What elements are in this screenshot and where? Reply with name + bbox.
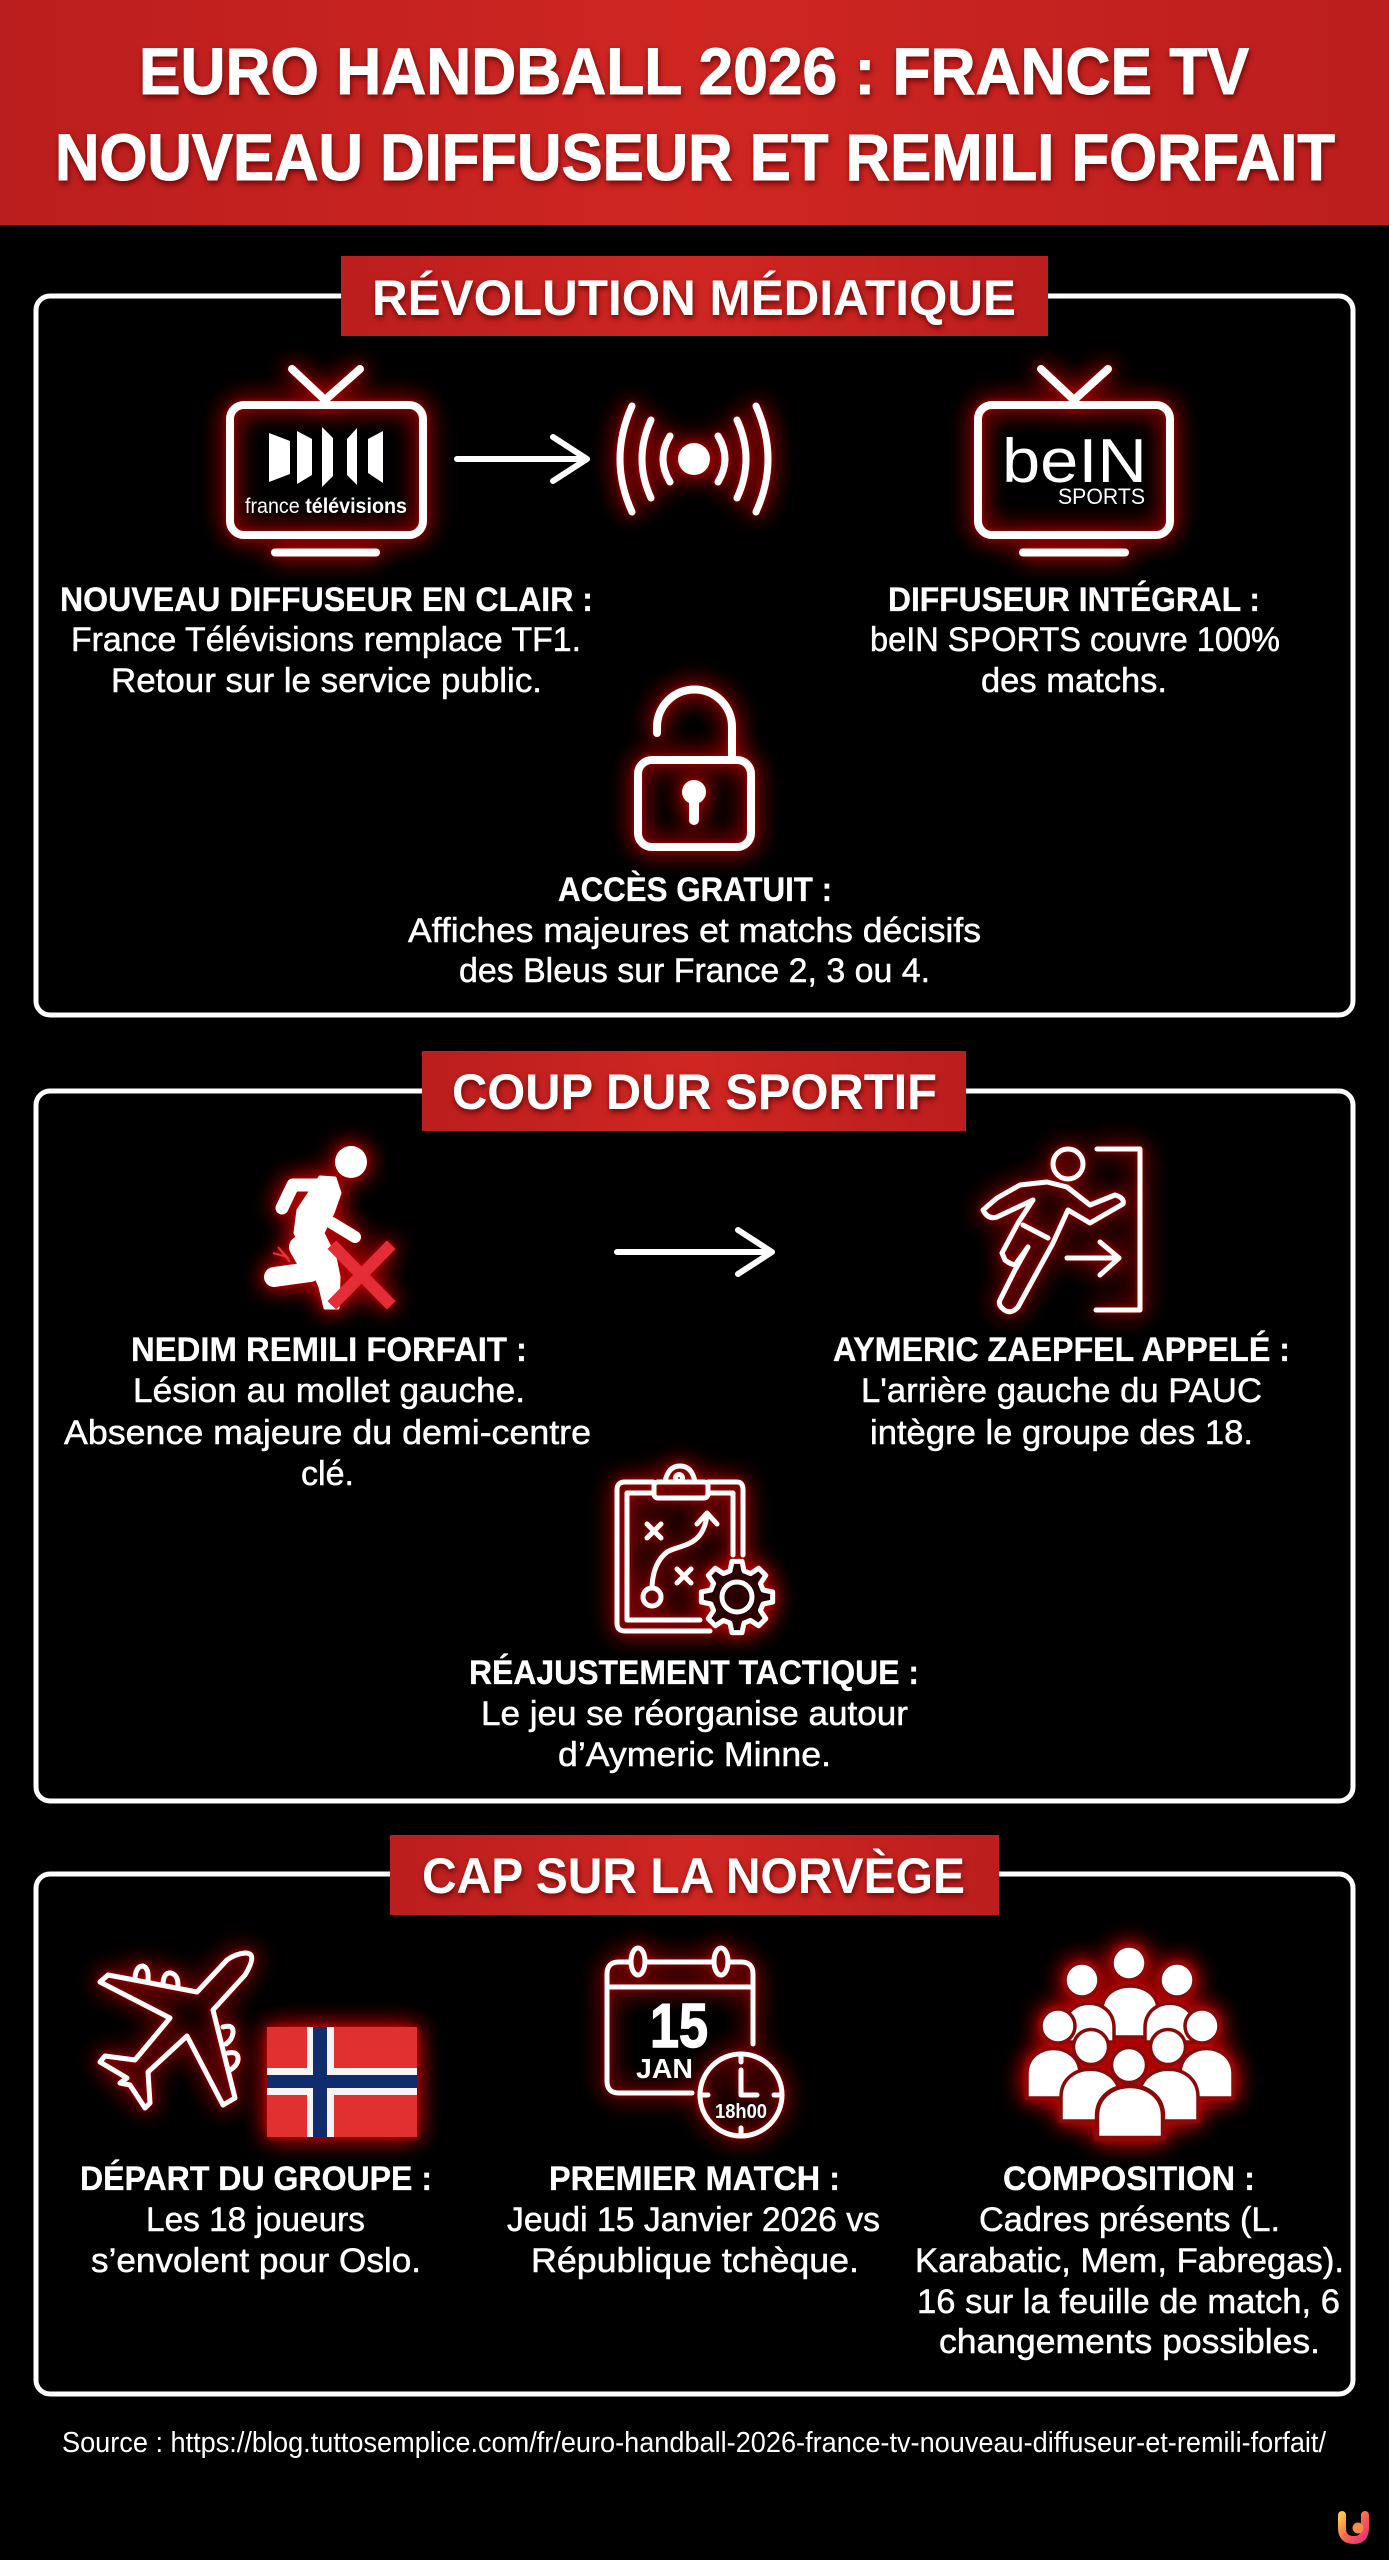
section heading: cap sur la norvège: CAP SUR LA NORVÈGE xyxy=(422,1848,965,1904)
text: composition: 16 sur la feuille de match, 6 xyxy=(917,2283,1340,2321)
icon: Norway flag xyxy=(267,2027,417,2137)
text: nedim remili forfait: NEDIM REMILI FORFAIT : xyxy=(131,1331,527,1369)
text: départ du groupe: DÉPART DU GROUPE : xyxy=(80,2160,432,2198)
text: nouveau diffuseur en clair: France Télévisions remplace TF1. xyxy=(71,621,581,659)
text: accès gratuit: des Bleus sur France 2, 3 ou 4. xyxy=(459,952,930,990)
icon: injured player xyxy=(273,1146,387,1308)
text: nedim remili forfait: Absence majeure du demi-centre xyxy=(64,1414,591,1452)
text: composition: COMPOSITION : xyxy=(1003,2160,1255,2198)
icon: TV beIN Sports: beIN xyxy=(1002,427,1147,496)
arrow: Remili to Zaepfel xyxy=(617,1230,772,1274)
text: nedim remili forfait: Lésion au mollet gauche. xyxy=(133,1372,525,1410)
text: diffuseur intégral xyxy=(870,581,1280,700)
icon: TV France Télévisions xyxy=(230,369,423,552)
text: diffuseur intégral: beIN SPORTS couvre 100% xyxy=(870,621,1280,659)
text: réajustement tactique: d’Aymeric Minne. xyxy=(558,1736,831,1774)
text: nouveau diffuseur en clair: NOUVEAU DIFFUSEUR EN CLAIR : xyxy=(60,581,593,619)
icon: airplane xyxy=(100,1953,252,2108)
icon: runner exiting door xyxy=(983,1149,1140,1312)
icon: calendar and clock xyxy=(607,1948,782,2136)
text: nedim remili forfait: clé. xyxy=(301,1455,354,1493)
section heading: cap sur la norvège xyxy=(390,1835,999,1915)
panel: cap sur la norvège xyxy=(36,1835,1353,2394)
text: accès gratuit: Affiches majeures et matchs décisifs xyxy=(408,912,981,950)
panel: coup dur sportif xyxy=(36,1051,1353,1801)
text: composition: Cadres présents (L. xyxy=(979,2201,1280,2239)
text: accès gratuit: ACCÈS GRATUIT : xyxy=(558,871,832,909)
icon: TV beIN Sports xyxy=(978,369,1170,552)
section heading: révolution médiatique xyxy=(341,256,1048,336)
text: composition: Karabatic, Mem, Fabregas). xyxy=(915,2242,1344,2280)
icon: broadcast signal xyxy=(620,406,768,512)
text: nouveau diffuseur en clair: Retour sur le service public. xyxy=(111,662,542,700)
text: aymeric zaepfel appelé xyxy=(833,1331,1290,1452)
icon: TV France Télévisions: france télévisions xyxy=(245,495,407,518)
text: premier match: Jeudi 15 Janvier 2026 vs xyxy=(507,2201,880,2239)
panel: révolution médiatique xyxy=(36,256,1353,1015)
text: départ du groupe xyxy=(80,2160,432,2280)
text: nouveau diffuseur en clair xyxy=(60,581,593,700)
icon: calendar and clock: JAN xyxy=(636,2053,693,2084)
text: diffuseur intégral: DIFFUSEUR INTÉGRAL : xyxy=(888,581,1260,619)
arrow: France TV to signal xyxy=(457,437,587,481)
text: aymeric zaepfel appelé: intègre le groupe des 18. xyxy=(870,1414,1253,1452)
header banner xyxy=(0,0,1389,225)
title xyxy=(55,34,1335,194)
source line: Source : https://blog.tuttosemplice.com/fr/euro-handball-2026-france-tv-nouveau-diffuseur-et-remili-forfait/ xyxy=(62,2427,1327,2459)
section heading: coup dur sportif: COUP DUR SPORTIF xyxy=(452,1064,937,1120)
text: aymeric zaepfel appelé: L'arrière gauche du PAUC xyxy=(861,1372,1262,1410)
text: composition: changements possibles. xyxy=(939,2323,1320,2361)
text: départ du groupe: Les 18 joueurs xyxy=(146,2201,365,2239)
section heading: révolution médiatique: RÉVOLUTION MÉDIATIQUE xyxy=(372,270,1016,326)
icon: group of players xyxy=(1027,1946,1233,2138)
text: départ du groupe: s’envolent pour Oslo. xyxy=(91,2242,421,2280)
text: réajustement tactique: RÉAJUSTEMENT TACTIQUE : xyxy=(469,1654,919,1692)
icon: open padlock xyxy=(638,690,751,847)
text: accès gratuit xyxy=(408,871,981,990)
section heading: coup dur sportif xyxy=(422,1051,966,1131)
text: premier match xyxy=(507,2160,880,2280)
text: réajustement tactique: Le jeu se réorganise autour xyxy=(481,1695,908,1733)
text: premier match: République tchèque. xyxy=(531,2242,859,2280)
text: nedim remili forfait xyxy=(64,1331,591,1493)
text: diffuseur intégral: des matchs. xyxy=(981,662,1167,700)
text: premier match: PREMIER MATCH : xyxy=(549,2160,840,2198)
icon: TV beIN Sports: SPORTS xyxy=(1058,484,1145,509)
icon: tactic clipboard and gear xyxy=(617,1466,773,1633)
title: EURO HANDBALL 2026 : FRANCE TV xyxy=(139,34,1249,108)
text: composition xyxy=(915,2160,1344,2361)
icon: brand logo xyxy=(1342,2515,1365,2540)
icon: calendar and clock: 15 xyxy=(650,1992,708,2061)
icon: calendar and clock: 18h00 xyxy=(715,2101,767,2123)
text: réajustement tactique xyxy=(469,1654,919,1774)
title: NOUVEAU DIFFUSEUR ET REMILI FORFAIT xyxy=(55,120,1335,194)
text: aymeric zaepfel appelé: AYMERIC ZAEPFEL APPELÉ : xyxy=(833,1331,1290,1369)
